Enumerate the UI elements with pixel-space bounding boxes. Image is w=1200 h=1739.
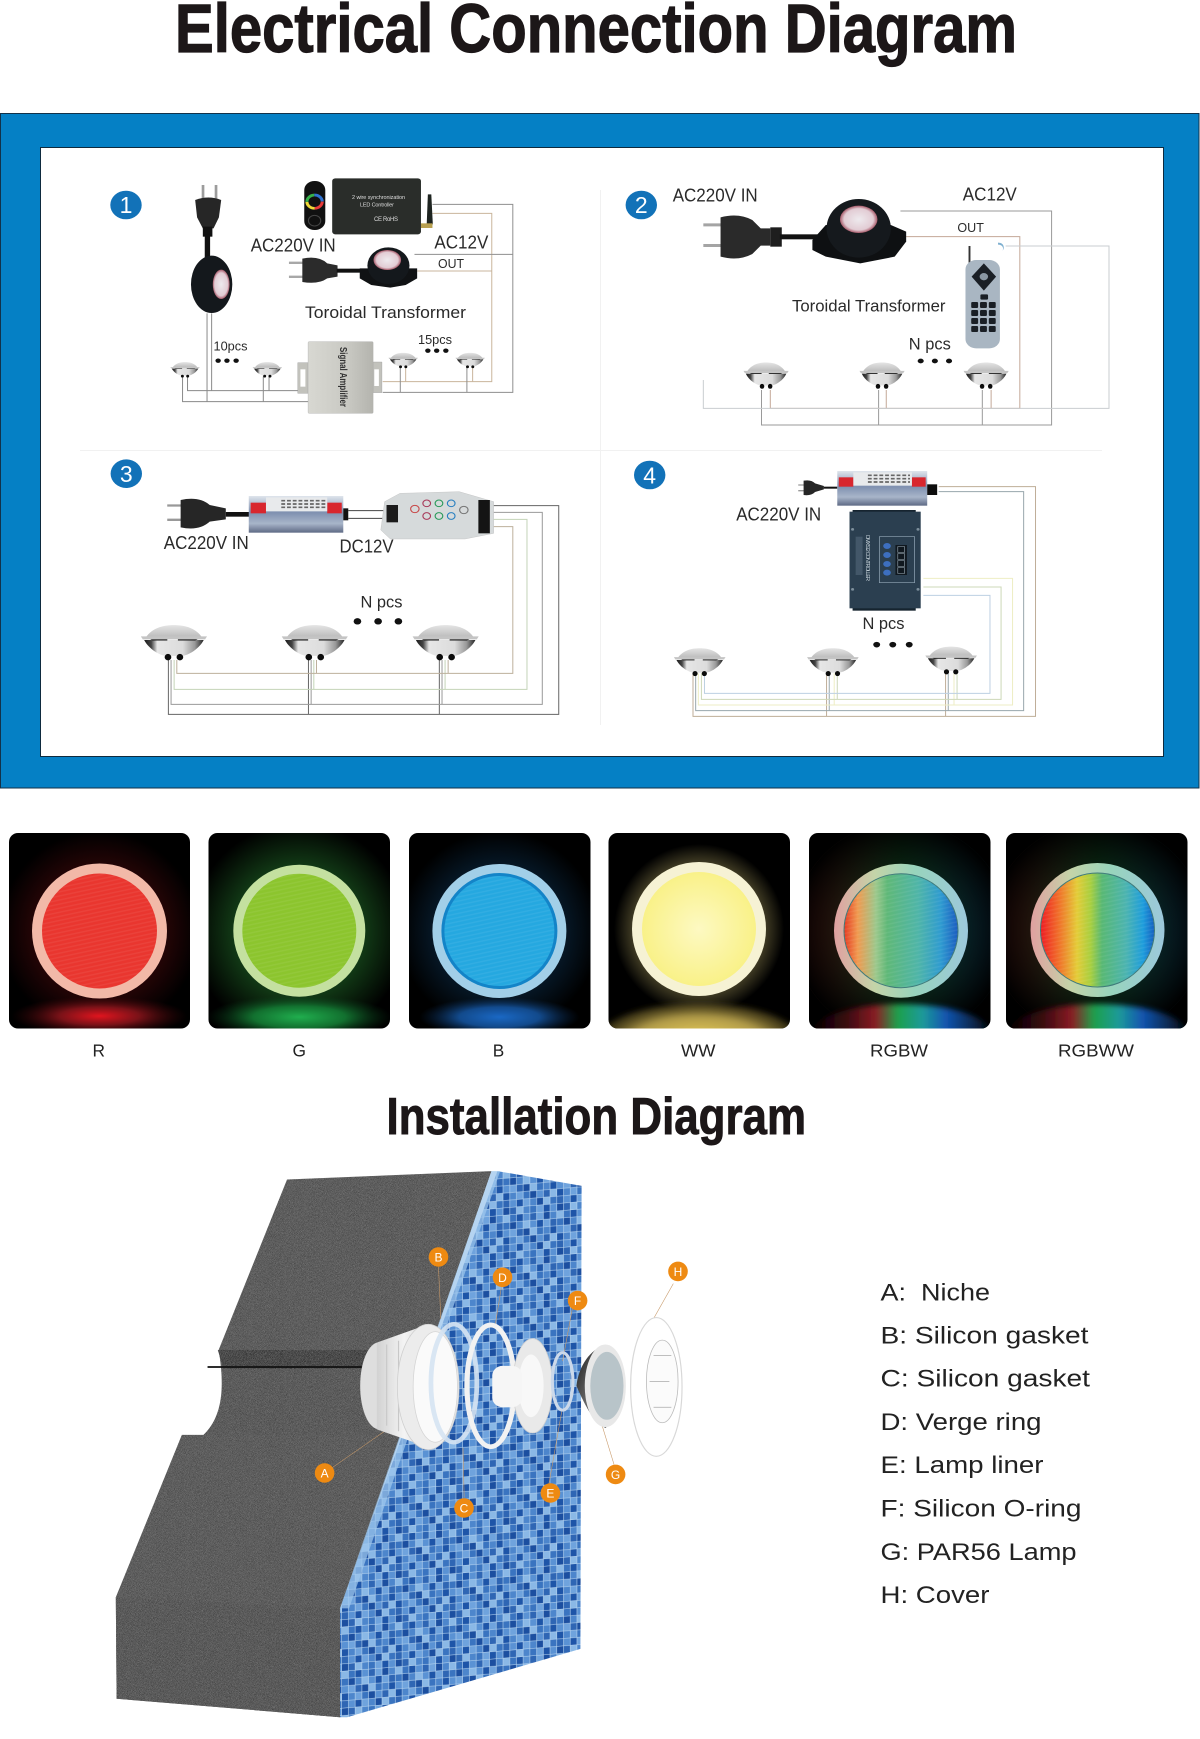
controller label 2: LED Controller bbox=[360, 202, 394, 208]
plug and power supply bbox=[167, 496, 348, 533]
controller name: DMX512 CONTROLLER bbox=[864, 535, 870, 581]
label AC220V IN: AC220V IN bbox=[736, 504, 821, 524]
dots bbox=[354, 618, 402, 624]
marker D: D bbox=[498, 1271, 507, 1285]
tile: green bbox=[208, 833, 390, 1028]
marker F bbox=[568, 1291, 587, 1310]
diagram 4 devices and wires bbox=[674, 471, 1036, 716]
marker C bbox=[454, 1498, 474, 1518]
wires bbox=[168, 506, 559, 714]
lamps bbox=[744, 363, 1009, 389]
wires bbox=[703, 211, 1109, 425]
marker A bbox=[315, 1463, 334, 1483]
tile: warm white bbox=[608, 833, 790, 1028]
caption G: G bbox=[292, 1041, 306, 1061]
D verge ring bbox=[467, 1325, 514, 1447]
plug and transformer bbox=[703, 199, 906, 263]
marker H bbox=[668, 1262, 688, 1281]
tile: RGBWW bbox=[1006, 833, 1188, 1028]
caption B: B bbox=[493, 1041, 504, 1061]
controller label: 2 wire synchronization bbox=[352, 195, 405, 201]
panel: blue wiring diagrams frame bbox=[0, 114, 1199, 788]
label AC220V IN: AC220V IN bbox=[251, 236, 336, 256]
horizontal plug and transformer bbox=[289, 247, 417, 288]
remote with colour wheel bbox=[304, 181, 325, 230]
lamps bbox=[170, 353, 485, 378]
legend C: C: Silicon gasket bbox=[880, 1366, 1090, 1393]
legend B: B: Silicon gasket bbox=[880, 1322, 1089, 1349]
diagram 2 devices and wires bbox=[703, 199, 1109, 425]
badge 2 bbox=[626, 191, 657, 219]
caption RGBWW: RGBWW bbox=[1058, 1041, 1135, 1061]
marker E: E bbox=[546, 1486, 554, 1500]
caption WW: WW bbox=[681, 1041, 716, 1061]
label AC220V IN: AC220V IN bbox=[673, 186, 758, 206]
marker B bbox=[429, 1247, 448, 1267]
badge 4 bbox=[634, 461, 665, 489]
lamps bbox=[674, 647, 977, 676]
label toroidal transformer: Toroidal Transformer bbox=[792, 298, 946, 316]
marker H: H bbox=[674, 1265, 682, 1279]
A niche housing bbox=[360, 1324, 459, 1450]
DMX controller bbox=[850, 510, 921, 611]
badge 2: 2 bbox=[635, 192, 648, 218]
panel: wiring diagram 3 bbox=[111, 459, 559, 714]
panel: lamp colours bbox=[9, 833, 1188, 1056]
label toroidal transformer: Toroidal Transformer bbox=[305, 303, 466, 322]
legend D: D: Verge ring bbox=[880, 1409, 1042, 1436]
legend G: G: PAR56 Lamp bbox=[880, 1539, 1076, 1566]
badge 4: 4 bbox=[643, 462, 656, 488]
tile: RGBW bbox=[809, 833, 990, 1028]
parts legend bbox=[880, 1280, 1090, 1609]
E lamp liner bbox=[492, 1339, 552, 1433]
wires bbox=[693, 487, 1036, 716]
legend H: H: Cover bbox=[880, 1582, 990, 1609]
wires bbox=[183, 204, 513, 402]
mosaic tile face bbox=[340, 1171, 582, 1717]
stone wall section bbox=[116, 1171, 491, 1717]
G PAR56 lamp bbox=[576, 1344, 626, 1428]
label OUT: OUT bbox=[438, 256, 464, 271]
lamps bbox=[141, 625, 479, 660]
caption R: R bbox=[92, 1041, 105, 1061]
RGB controller bbox=[381, 492, 494, 539]
panel: wiring diagram 2 bbox=[626, 185, 1109, 425]
signal amplifier box bbox=[298, 342, 382, 413]
legend A: A: Niche bbox=[880, 1280, 990, 1307]
remote with keypad bbox=[965, 243, 1004, 348]
label 10pcs: 10pcs bbox=[214, 339, 248, 354]
plug and power supply bbox=[798, 471, 937, 506]
label AC12V: AC12V bbox=[963, 185, 1017, 205]
marker A: A bbox=[321, 1466, 329, 1480]
amplifier label: Signal Amplifier bbox=[337, 347, 348, 407]
label AC12V: AC12V bbox=[434, 233, 488, 253]
caption RGBW: RGBW bbox=[870, 1041, 928, 1061]
badge 1: 1 bbox=[120, 192, 132, 218]
vertical plug and transformer bbox=[191, 185, 232, 313]
marker C: C bbox=[460, 1502, 469, 1516]
marker G: G bbox=[611, 1468, 620, 1482]
diagram 1 devices and wires bbox=[170, 178, 513, 413]
tile: blue bbox=[409, 833, 590, 1028]
label AC220V IN: AC220V IN bbox=[164, 533, 249, 553]
leader lines bbox=[325, 1267, 673, 1498]
badge 3: 3 bbox=[120, 461, 133, 487]
panel: wiring diagram 4 bbox=[634, 461, 1036, 716]
F silicon o-ring bbox=[552, 1353, 573, 1410]
marker D bbox=[493, 1268, 512, 1287]
legend F: F: Silicon O-ring bbox=[880, 1496, 1082, 1523]
tile: red bbox=[9, 833, 190, 1028]
dots bbox=[873, 642, 913, 647]
label N pcs: N pcs bbox=[360, 592, 402, 611]
label 15pcs: 15pcs bbox=[418, 332, 452, 347]
H cover bbox=[631, 1318, 682, 1456]
diagram 3 devices and wires bbox=[141, 492, 559, 714]
label N pcs: N pcs bbox=[862, 614, 904, 633]
heading: Installation Diagram: Installation Diagram bbox=[386, 1088, 806, 1146]
panel: wiring diagram 1 bbox=[110, 178, 513, 413]
B silicon gasket bbox=[431, 1324, 477, 1442]
badge 3 bbox=[111, 459, 142, 488]
marker E bbox=[541, 1483, 560, 1503]
legend E: E: Lamp liner bbox=[880, 1452, 1044, 1479]
controller mark: CE RoHS bbox=[374, 217, 398, 223]
cable bbox=[208, 1365, 362, 1370]
label N pcs: N pcs bbox=[909, 334, 951, 353]
badge 1 bbox=[110, 191, 142, 219]
LED controller box bbox=[332, 178, 433, 234]
label OUT: OUT bbox=[957, 220, 984, 235]
marker G bbox=[606, 1465, 625, 1484]
marker B: B bbox=[434, 1250, 443, 1264]
label DC12V: DC12V bbox=[340, 536, 394, 556]
dots bbox=[918, 359, 952, 363]
dots bbox=[215, 348, 449, 363]
illustration: exploded wall installation bbox=[116, 1171, 688, 1717]
marker F: F bbox=[574, 1294, 581, 1308]
